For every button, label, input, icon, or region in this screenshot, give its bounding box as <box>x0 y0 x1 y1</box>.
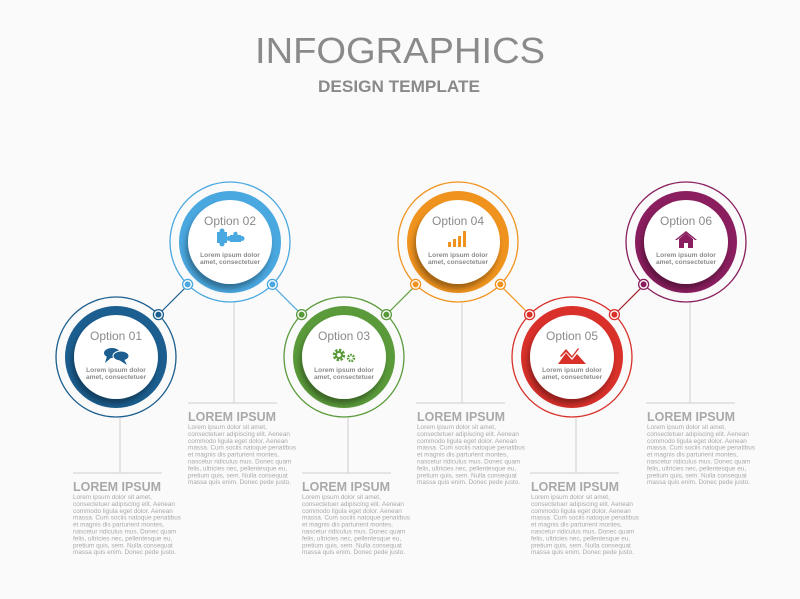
subtitle: DESIGN TEMPLATE <box>318 78 480 96</box>
text block 2: LOREM IPSUM <box>188 409 276 424</box>
circle: option 01: Lorem ipsum dolor <box>86 367 146 374</box>
circle: option 06 <box>626 182 746 302</box>
text block 1: LOREM IPSUM <box>73 479 161 494</box>
text block 3 <box>302 479 410 556</box>
icon: puzzle <box>217 228 244 246</box>
circle: option 02: amet, consectetuer <box>200 259 260 266</box>
circle: option 01 <box>56 297 176 417</box>
circle: option 06: Option 06 <box>660 214 712 228</box>
text block 2 <box>188 409 296 486</box>
icon: mountains <box>558 348 586 364</box>
circle: option 03: Option 03 <box>318 329 370 343</box>
circle: option 05: amet, consectetuer <box>542 374 602 381</box>
text block 6: LOREM IPSUM <box>647 409 735 424</box>
title: INFOGRAPHICS <box>255 30 545 71</box>
icon: bar chart <box>448 231 466 247</box>
text block 5 <box>531 479 639 556</box>
circle: option 01: amet, consectetuer <box>86 374 146 381</box>
circle: option 04: amet, consectetuer <box>428 259 488 266</box>
circle: option 05: Lorem ipsum dolor <box>542 367 602 374</box>
circle: option 06: amet, consectetuer <box>656 259 716 266</box>
stems and rules <box>73 303 735 473</box>
text block 4 <box>417 409 525 486</box>
circle: option 02: Lorem ipsum dolor <box>200 252 260 259</box>
icon: gears <box>334 350 354 361</box>
text block 6 <box>647 409 755 486</box>
text block 4: LOREM IPSUM <box>417 409 505 424</box>
circle: option 05 <box>512 297 632 417</box>
circle: option 04: Lorem ipsum dolor <box>428 252 488 259</box>
circle: option 04: Option 04 <box>432 214 484 228</box>
circle: option 02 <box>170 182 290 302</box>
text block 1 <box>73 479 181 556</box>
circle: option 05: Option 05 <box>546 329 598 343</box>
text block 5: LOREM IPSUM <box>531 479 619 494</box>
circle: option 02: Option 02 <box>204 214 256 228</box>
circle: option 03 <box>284 297 404 417</box>
circle: option 06: Lorem ipsum dolor <box>656 252 716 259</box>
text block 3: LOREM IPSUM <box>302 479 390 494</box>
circle: option 01: Option 01 <box>90 329 142 343</box>
connectors <box>158 285 644 315</box>
icon: speech bubbles <box>104 348 129 365</box>
circle: option 03: amet, consectetuer <box>314 374 374 381</box>
circle: option 04 <box>398 182 518 302</box>
icon: house <box>675 231 697 248</box>
circle: option 03: Lorem ipsum dolor <box>314 367 374 374</box>
